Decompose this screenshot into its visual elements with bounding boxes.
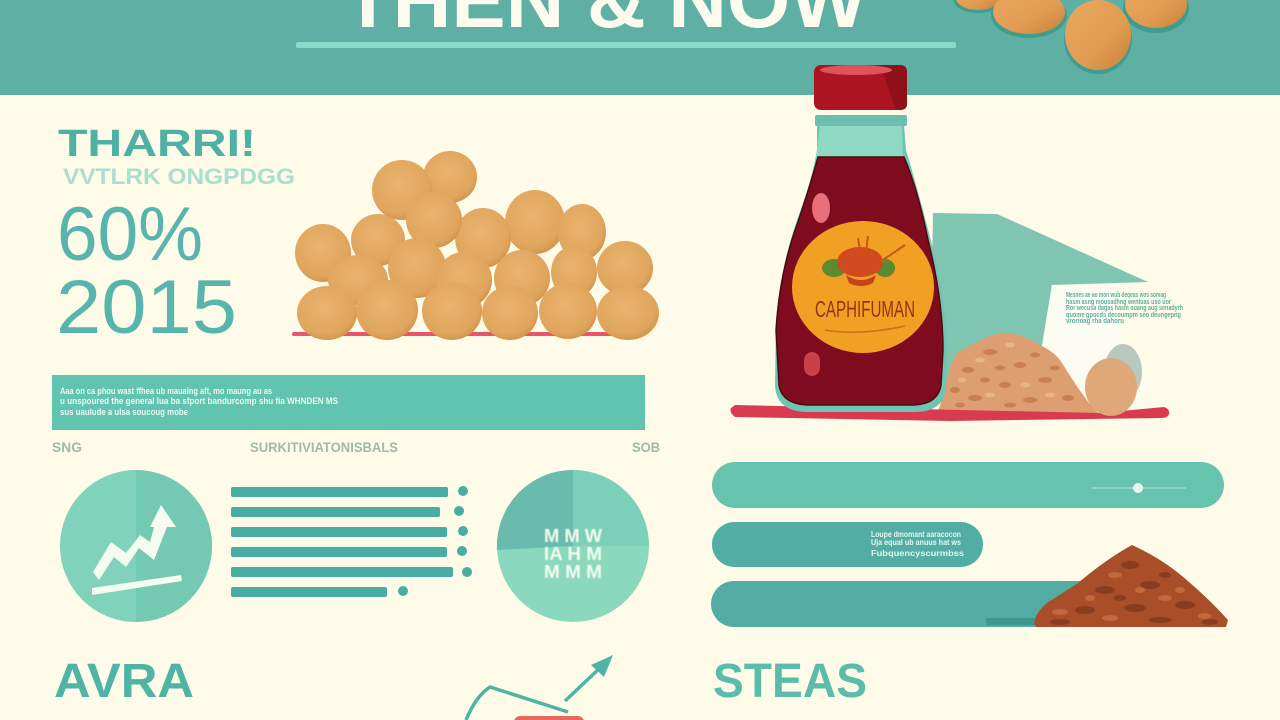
banner text — [60, 386, 338, 417]
header underline — [296, 42, 956, 48]
horizontal bar list — [231, 486, 472, 597]
lower highlight — [804, 352, 820, 376]
banner text: u unspoured the general lua ba sfport bandurcomp shu fia WHNDEN MS — [60, 396, 338, 406]
pie text — [544, 526, 602, 582]
note text: Ror wecusa dagas hasm ouang aug senadyrh — [1066, 305, 1183, 312]
banner text: sus uaulude a ulsa soucoug mobe — [60, 407, 188, 417]
pill text: Fubquencyscurmbss — [871, 549, 965, 558]
icon: rising zigzag arrow — [92, 505, 182, 595]
left subheading: VVTLRK ONGPDGG — [63, 164, 295, 189]
sauce fill — [776, 157, 943, 405]
pill bar 1 — [712, 462, 1224, 508]
column labels: SURKITIVIATONISBALS — [250, 439, 398, 455]
grain mound — [938, 333, 1100, 415]
chickpea pile — [292, 151, 659, 340]
bottle cap — [814, 65, 907, 110]
note text — [1066, 292, 1183, 325]
pill text — [871, 530, 965, 558]
column labels: SNG — [52, 439, 82, 455]
bottle label — [792, 221, 934, 353]
note text: vrorioag rha dahoru — [1066, 318, 1124, 325]
egg and shadow — [1085, 344, 1142, 416]
stat: 60%: 60% — [57, 192, 203, 277]
red badge — [514, 716, 584, 720]
header nuts — [954, 0, 1189, 74]
heading: STEAS: STEAS — [713, 655, 867, 708]
bottle collar — [815, 115, 907, 126]
bottle glass — [775, 125, 947, 412]
trend line and arrow — [466, 655, 613, 720]
slider — [1092, 483, 1186, 493]
note card — [1034, 285, 1183, 400]
banner text: Aaa on ca phou wast ffhea ub mauaing aft, mo maung au as — [60, 386, 272, 396]
note text: hasm asng mousadhng wentuas uso uor — [1066, 299, 1171, 306]
left heading: THARRI! — [58, 123, 256, 165]
pill bar 3 — [711, 581, 1131, 627]
label illustration — [822, 236, 905, 332]
bottle neck — [816, 126, 903, 158]
label text: CAPHIFUMAN — [815, 296, 915, 322]
pie text: IA H M — [544, 544, 602, 564]
pie circle — [497, 470, 649, 622]
description banner — [52, 375, 645, 430]
pill text: Uja equal ub anuus hat ws — [871, 538, 961, 547]
sauce bottle — [775, 65, 947, 412]
note text: Mesnes ae ao mon wub deqeas wos somag — [1066, 292, 1166, 299]
pie text: M M W — [544, 526, 602, 546]
column labels: SOB — [632, 439, 660, 455]
stat: 2015: 2015 — [56, 265, 237, 350]
spice mound — [1034, 545, 1228, 627]
icon: growth circle — [60, 470, 212, 622]
table line — [730, 405, 1169, 421]
column labels — [52, 439, 660, 455]
header band — [0, 0, 1280, 95]
teal backdrop shape — [930, 213, 1148, 400]
pill text: Loupe dmomant aaracocon — [871, 530, 961, 539]
pie text: M M M — [544, 562, 602, 582]
pill bar 2 — [712, 522, 983, 567]
highlight — [812, 193, 830, 223]
note text: quome gpocds decoumpm seo deungepng — [1066, 312, 1181, 319]
heading: AVRA: AVRA — [54, 655, 194, 708]
